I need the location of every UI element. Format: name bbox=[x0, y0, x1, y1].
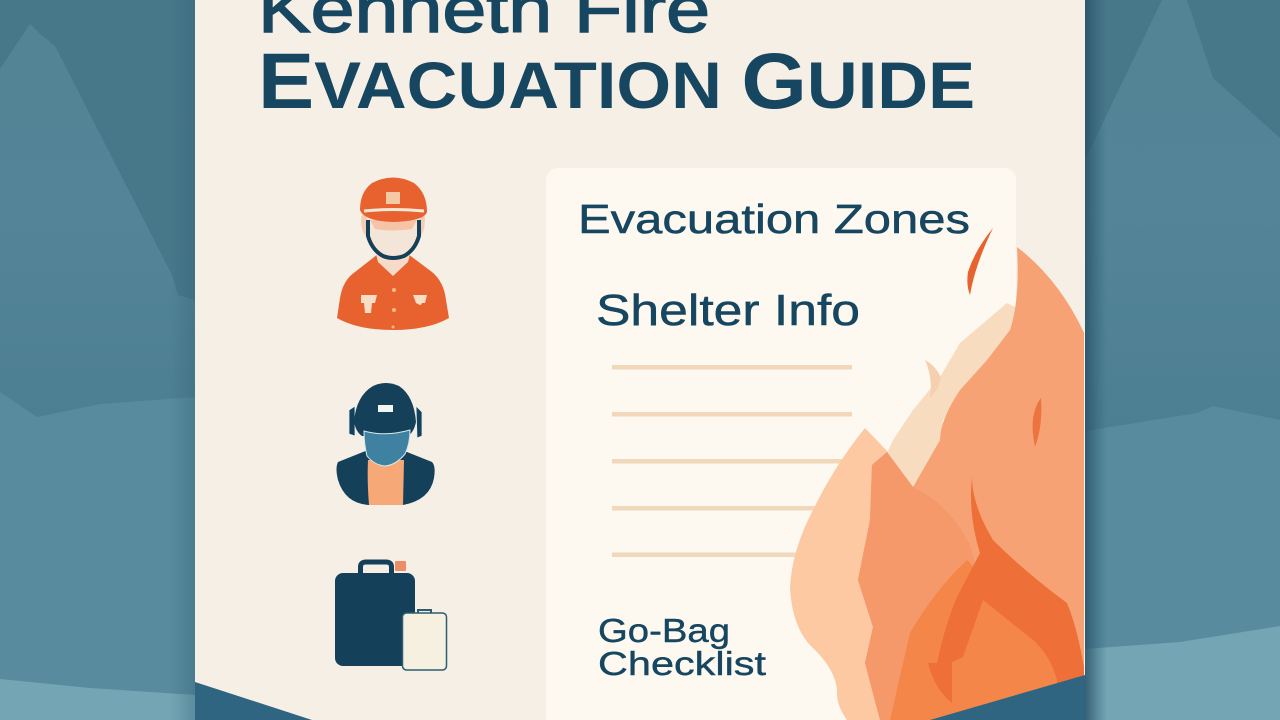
chest bbox=[368, 460, 404, 505]
text placeholder lines bbox=[612, 365, 852, 557]
pale flame tongue bbox=[887, 303, 1017, 487]
neck bbox=[375, 250, 411, 276]
hood bbox=[354, 383, 416, 436]
heading: evacuation zones: Evacuation Zones bbox=[578, 196, 970, 242]
helmet brim stripe bbox=[364, 210, 424, 211]
panel: information card bbox=[546, 168, 1016, 720]
shirt buttons bbox=[392, 288, 396, 328]
main flame bbox=[858, 247, 1085, 720]
small container bbox=[402, 613, 446, 670]
red tag bbox=[395, 561, 406, 571]
flame core bbox=[890, 560, 1060, 720]
ember right bbox=[1033, 398, 1041, 447]
helmet strap bbox=[368, 220, 419, 258]
hood badge bbox=[378, 405, 393, 412]
light back flame bbox=[790, 428, 888, 720]
corner wedge: bottom right bbox=[930, 675, 1085, 720]
icon: go-bag and container bbox=[335, 561, 446, 670]
title bbox=[258, 0, 975, 125]
title line: Evacuation Guide: EVACUATION GUIDE bbox=[258, 36, 975, 125]
heading: shelter info: Shelter Info bbox=[596, 286, 860, 335]
corner wedge: bottom left bbox=[195, 682, 312, 720]
bag body bbox=[335, 573, 415, 666]
helmet badge bbox=[386, 192, 400, 204]
inner flame bbox=[928, 477, 1085, 720]
face bbox=[367, 215, 419, 257]
label: go-bag checklist: Go-Bag bbox=[598, 612, 730, 649]
illustration: flames bbox=[790, 228, 1085, 720]
ears bbox=[361, 214, 425, 236]
shoulders and shirt bbox=[337, 254, 449, 330]
icon: person with mask bbox=[336, 383, 435, 505]
icon: firefighter bbox=[337, 178, 449, 330]
label: go-bag checklist: Checklist bbox=[598, 645, 766, 682]
bag handle bbox=[360, 562, 392, 574]
small container handle bbox=[418, 610, 431, 613]
ear protectors bbox=[349, 406, 422, 438]
helmet bbox=[360, 178, 427, 222]
card background bbox=[546, 168, 1016, 720]
hairline shade bbox=[370, 220, 417, 230]
ember top bbox=[967, 228, 993, 295]
lower mid flame bbox=[858, 452, 985, 720]
face mask bbox=[364, 430, 410, 466]
poster sheet bbox=[195, 0, 1085, 720]
small pale wisp bbox=[925, 360, 941, 398]
shirt pockets bbox=[361, 295, 427, 313]
jacket bbox=[336, 450, 435, 505]
